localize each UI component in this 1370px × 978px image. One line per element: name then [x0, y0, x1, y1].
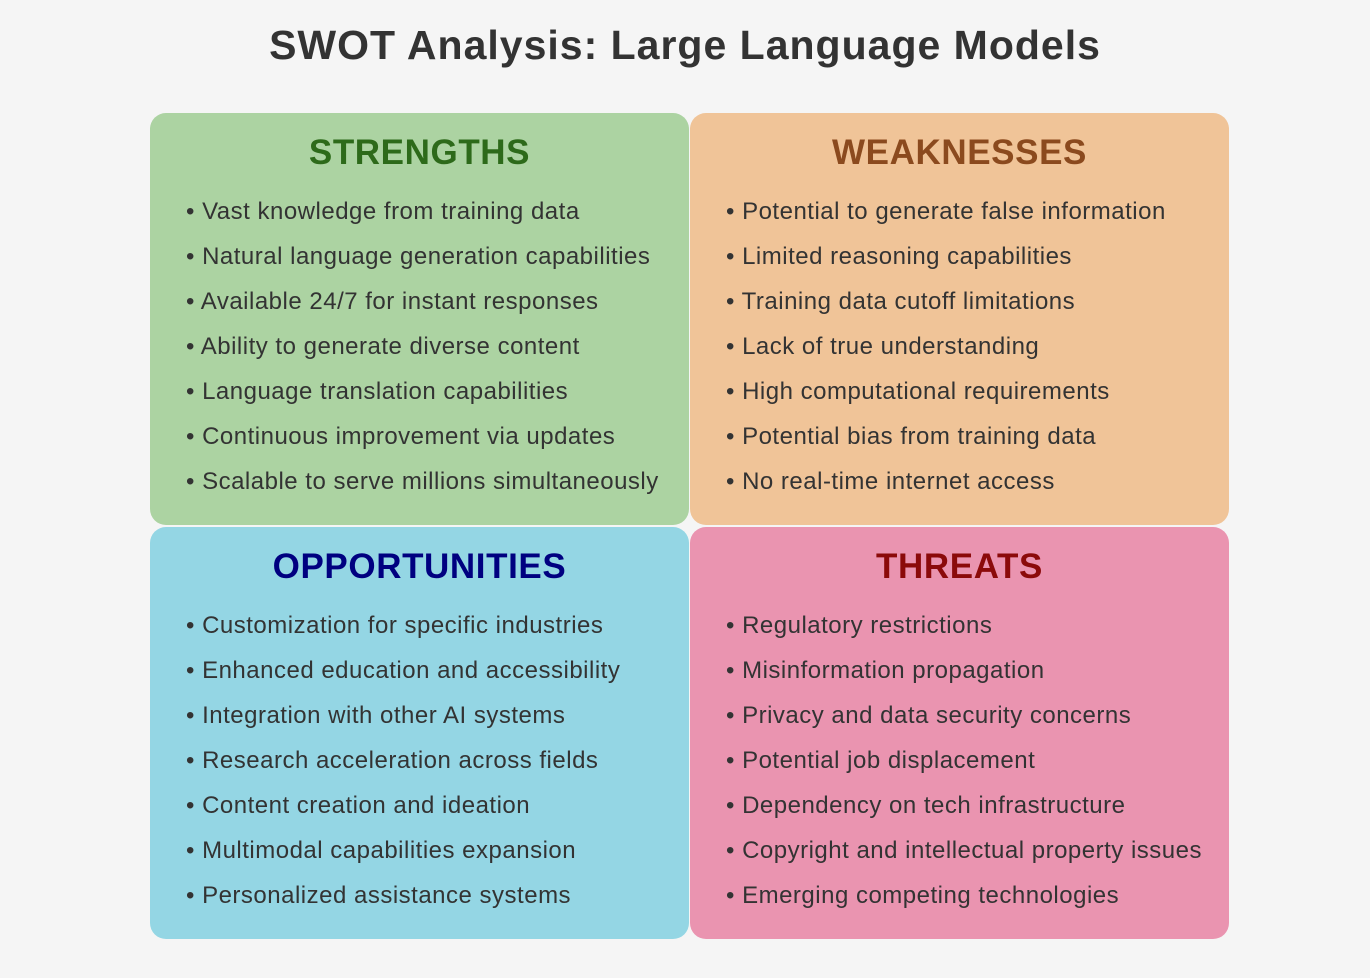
- list: opportunities: • Integration with other AI systems: [186, 702, 565, 729]
- list: opportunities: [186, 612, 620, 909]
- heading: threats: THREATS: [876, 547, 1043, 586]
- list: strengths: • Vast knowledge from training data: [186, 198, 580, 225]
- panel: threats: [690, 527, 1229, 939]
- list: strengths: • Available 24/7 for instant responses: [186, 288, 599, 315]
- heading: strengths: STRENGTHS: [309, 133, 530, 172]
- panel: opportunities: [150, 527, 689, 939]
- list: threats: • Copyright and intellectual property issues: [726, 837, 1202, 864]
- list: strengths: • Scalable to serve millions simultaneously: [186, 468, 659, 495]
- list: opportunities: • Personalized assistance systems: [186, 882, 571, 909]
- list: threats: • Privacy and data security concerns: [726, 702, 1131, 729]
- list: weaknesses: • Limited reasoning capabilities: [726, 243, 1072, 270]
- list: threats: • Regulatory restrictions: [726, 612, 992, 639]
- list: opportunities: • Customization for specific industries: [186, 612, 603, 639]
- list: weaknesses: • Lack of true understanding: [726, 333, 1039, 360]
- list: weaknesses: • High computational requirements: [726, 378, 1110, 405]
- panel: strengths: [150, 113, 689, 525]
- list: opportunities: • Research acceleration across fields: [186, 747, 598, 774]
- list: weaknesses: • Potential bias from training data: [726, 423, 1096, 450]
- list: weaknesses: • Training data cutoff limitations: [726, 288, 1075, 315]
- list: strengths: • Continuous improvement via updates: [186, 423, 615, 450]
- list: strengths: • Language translation capabilities: [186, 378, 568, 405]
- list: opportunities: • Enhanced education and accessibility: [186, 657, 620, 684]
- list: opportunities: • Multimodal capabilities expansion: [186, 837, 576, 864]
- list: weaknesses: • Potential to generate false information: [726, 198, 1166, 225]
- list: weaknesses: [726, 198, 1166, 495]
- list: strengths: • Ability to generate diverse content: [186, 333, 580, 360]
- title: SWOT Analysis: Large Language Models: [269, 22, 1101, 68]
- list: threats: • Emerging competing technologies: [726, 882, 1119, 909]
- list: threats: • Dependency on tech infrastructure: [726, 792, 1125, 819]
- panel: weaknesses: [690, 113, 1229, 525]
- list: threats: • Misinformation propagation: [726, 657, 1045, 684]
- heading: weaknesses: WEAKNESSES: [832, 133, 1087, 172]
- list: threats: [726, 612, 1202, 909]
- list: strengths: • Natural language generation capabilities: [186, 243, 650, 270]
- list: threats: • Potential job displacement: [726, 747, 1035, 774]
- list: weaknesses: • No real-time internet access: [726, 468, 1055, 495]
- list: opportunities: • Content creation and ideation: [186, 792, 530, 819]
- heading: opportunities: OPPORTUNITIES: [273, 547, 566, 586]
- list: strengths: [186, 198, 659, 495]
